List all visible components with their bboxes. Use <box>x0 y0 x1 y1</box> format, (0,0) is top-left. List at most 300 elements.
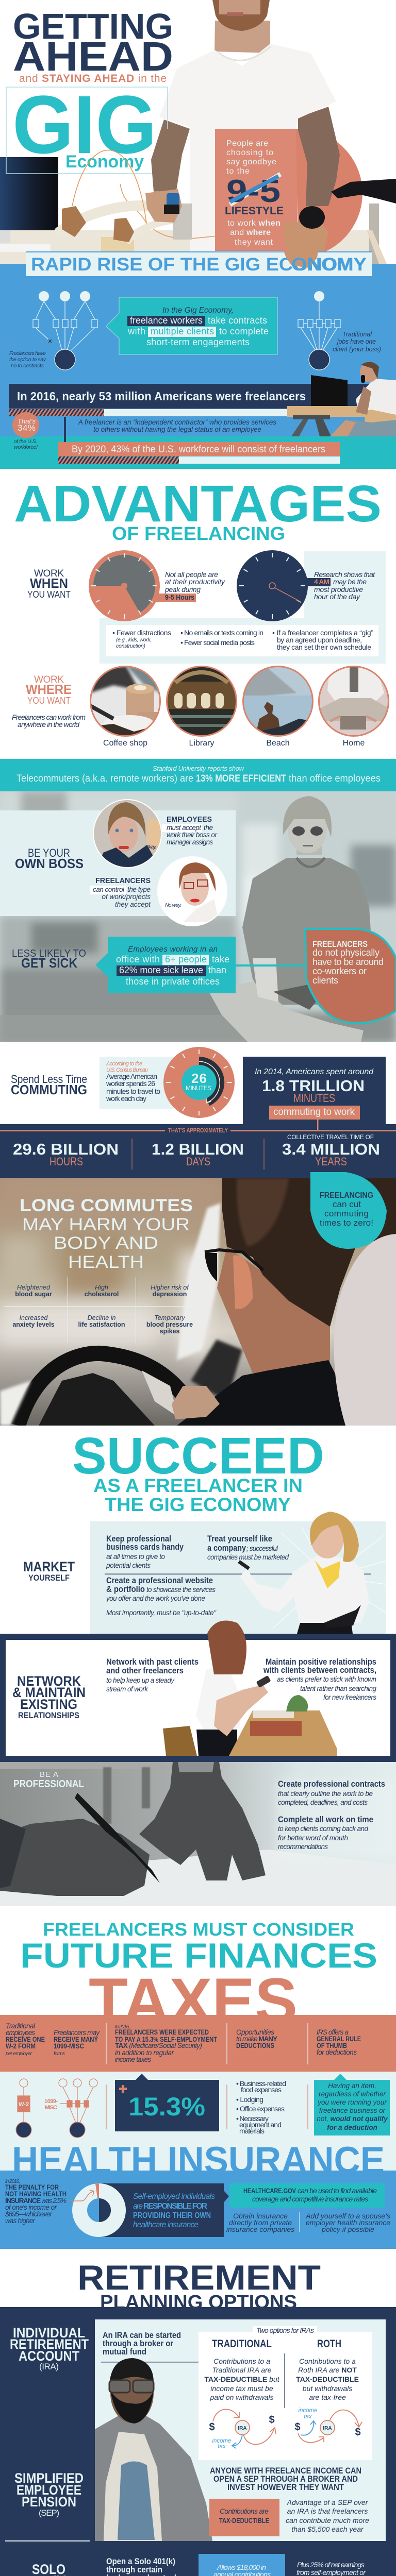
panel: ira comparison: income tax must be <box>210 2384 273 2393</box>
text: census: Average American <box>106 1072 157 1080</box>
clock: 9 to 5 <box>89 550 160 621</box>
label: ira <box>10 2325 89 2371</box>
text: marketing tips: & portfolio <box>106 1585 145 1594</box>
grid: health effects: depression <box>153 1291 187 1298</box>
panel: tax facts: income taxes <box>115 2056 151 2063</box>
photo: man with glasses <box>95 2358 212 2541</box>
list panel: • Fewer social media posts <box>180 638 255 647</box>
grid: health effects: cholesterol <box>85 1291 119 1298</box>
callout: co-workers: do not physically <box>312 947 380 958</box>
row: solo 401k <box>29 2554 367 2576</box>
title: getting ahead: GETTING <box>13 6 173 46</box>
callout: gig economy definition: multiple clients <box>151 326 214 336</box>
text: traditional jobs: jobs have one <box>336 338 376 345</box>
callout: co-workers <box>305 929 396 1023</box>
panel: ira comparison: Two options for IRAs <box>256 2326 314 2334</box>
callout: healthcare.gov: HEALTHCARE.GOV <box>243 2187 296 2195</box>
clock: 26 minutes <box>163 1047 235 1118</box>
label: sep: PENSION <box>22 2494 76 2510</box>
list: deductions <box>236 2079 286 2135</box>
callout: 9-5 lifestyle: LIFESTYLE <box>225 205 284 217</box>
label: WORK <box>34 674 64 685</box>
heading: succeed <box>72 1427 324 1515</box>
panel: ira comparison: Traditional IRA are <box>212 2366 272 2374</box>
heading: future finances: FREELANCERS MUST CONSIDER <box>43 1920 354 1940</box>
panel: tax facts: forms <box>54 2051 65 2057</box>
row: solo 401k: Allows $18,000 in <box>217 2563 266 2571</box>
callout: sick leave: those in private offices <box>126 976 220 987</box>
diagram: roth ira flow: IRA <box>323 2426 332 2431</box>
text: penalty: NOT HAVING HEALTH <box>5 2190 67 2198</box>
stat bar: 43 percent by 2020 <box>58 442 340 464</box>
heading: be a professional: BE A <box>40 1770 58 1779</box>
text: employees: the <box>204 824 213 832</box>
text: sep <box>209 2466 369 2536</box>
list panel: they can set their own schedule <box>277 643 371 651</box>
diagram: 1099-misc forms: MISC <box>45 2105 57 2111</box>
text: sep: INVEST HOWEVER THEY WANT <box>227 2482 344 2492</box>
callout: co-workers: FREELANCERS <box>312 939 368 949</box>
text: anywhere: anywhere in the world <box>18 720 80 728</box>
badge: 34 percent: That's <box>18 417 36 425</box>
list: deductions: equipment and <box>239 2121 282 2129</box>
callout: gig economy definition: In the Gig Economy, <box>162 306 234 315</box>
panel: rapid rise of the gig economy <box>0 251 396 469</box>
diagram: roth ira flow: income <box>298 2408 318 2414</box>
title: getting ahead: and STAYING AHEAD in the <box>19 73 167 84</box>
text: ira start: An IRA can be started <box>103 2331 181 2340</box>
panel: commuting totals <box>0 1057 396 1178</box>
list: deductions: food expenses <box>241 2086 282 2094</box>
callout: co-workers: co-workers or <box>312 966 367 976</box>
panel: ira comparison: TAX-DEDUCTIBLE but <box>204 2375 280 2383</box>
heading: be a professional: PROFESSIONAL <box>13 1778 84 1790</box>
photo: library <box>167 666 237 737</box>
callout: 9-5 lifestyle: to the <box>226 167 250 176</box>
text: network tips: as clients prefer to stick with known <box>277 1675 376 1683</box>
panel: tax facts: employees <box>6 2029 35 2037</box>
text: census: U.S. Census Bureau <box>106 1067 148 1073</box>
panel: commuting totals: commuting to work <box>273 1107 355 1117</box>
text: ira start: mutual fund <box>103 2347 146 2357</box>
label: WHERE <box>26 682 72 697</box>
text: professional tips: to keep clients coming back and <box>278 1825 368 1833</box>
text: network tips <box>106 1657 376 1701</box>
photo: man with bicycle <box>0 0 396 264</box>
heading: advantages of freelancing: ADVANTAGES <box>14 475 382 533</box>
badge: 34 percent: 34% <box>18 423 36 433</box>
panel: tax facts: IRS offers a <box>317 2028 349 2036</box>
grid: health effects: blood sugar <box>15 1291 52 1298</box>
label: YOU WANT <box>27 696 71 706</box>
label: WORK <box>34 568 64 579</box>
photo: presenting woman <box>238 1512 369 1634</box>
text: 9-5 hours: peak during <box>164 585 201 594</box>
callout: sick leave: office with <box>116 954 160 964</box>
diagram: traditional ira flow: tax <box>218 2444 226 2450</box>
callout: 9-5 lifestyle: and where <box>230 228 271 237</box>
panel: ira comparison: Roth IRA are NOT <box>298 2366 357 2374</box>
callout: sick leave <box>95 937 305 993</box>
panel: tax facts: RECEIVE MANY <box>54 2036 98 2043</box>
location labels: Coffee shop <box>103 739 147 748</box>
photo: driver from behind <box>0 1178 396 1426</box>
text: penalty <box>5 2179 67 2225</box>
ring outlines <box>91 667 389 736</box>
label: ira: RETIREMENT <box>10 2336 89 2352</box>
text: professional tips: for better word of mouth <box>278 1834 348 1842</box>
text: network tips: and other freelancers <box>106 1666 184 1675</box>
text: penalty: of one's income or <box>5 2204 57 2211</box>
panel: tax facts: Freelancers may <box>54 2029 100 2037</box>
text: marketing tips: Most importantly, must be "up-to-date" <box>106 1609 217 1617</box>
light panel <box>95 2319 386 2541</box>
location labels: Home <box>343 739 365 748</box>
callout: 9-5 lifestyle: say goodbye <box>226 158 276 166</box>
heading: retirement planning options: RETIREMENT <box>77 2258 321 2297</box>
callout: co-workers: have to be around <box>312 957 384 967</box>
heading: HEALTH INSURANCE <box>12 2140 385 2181</box>
diagram: roth ira flow: $ <box>355 2427 361 2438</box>
text: options: insurance companies <box>226 2225 294 2233</box>
grid: health effects: Higher risk of <box>151 1284 189 1291</box>
list: deductions: • Office expenses <box>236 2105 285 2113</box>
label: & MAINTAIN <box>12 1685 86 1700</box>
list panel: • No emails or texts coming in <box>180 629 263 637</box>
text: 9-5 hours: at their productivity <box>165 578 225 586</box>
label: COMMUTING <box>11 1082 87 1097</box>
text: freelancer definition <box>64 417 276 442</box>
panel: tax facts: Traditional <box>6 2022 36 2030</box>
text: marketing tips: business cards handy <box>106 1543 184 1552</box>
callout: gig economy definition <box>106 297 277 354</box>
heading: long commutes: BODY AND <box>54 1233 158 1253</box>
text: network tips: with clients between contracts, <box>263 1666 376 1675</box>
callout: sick leave: Employees working in an <box>128 945 218 954</box>
text: penalty: In 2016, <box>5 2179 20 2184</box>
label: NETWORK <box>17 1673 81 1689</box>
text: 4 am: Research shows that <box>314 570 375 579</box>
heading: long commutes: HEALTH <box>68 1252 144 1272</box>
text: freelancers: they accept <box>115 901 151 908</box>
list panel: • Fewer distractions <box>112 629 171 637</box>
diagram: freelancer network <box>33 291 97 370</box>
text: penalty: INSURANCE was 2.5% <box>5 2197 67 2205</box>
callout: self-employed: Self-employed individuals <box>133 2192 215 2201</box>
heading: taxes: TAXES <box>89 1965 298 2037</box>
callout: gig economy definition: with <box>127 326 145 336</box>
callout: cut commuting to zero <box>310 1172 387 1249</box>
photo: coffee shop <box>90 666 160 737</box>
panel: tax facts: TO PAY A 15.3% SELF-EMPLOYMENT <box>115 2036 218 2043</box>
text: professional tips <box>278 1780 385 1851</box>
label: RELATIONSHIPS <box>18 1710 79 1720</box>
text: census: According to the <box>106 1061 142 1067</box>
text: 4 am: may be the <box>333 578 367 586</box>
grid: health effects: Heightened <box>17 1284 51 1291</box>
label: ira: INDIVIDUAL <box>13 2325 85 2341</box>
text: anywhere: Freelancers can work from <box>12 713 86 721</box>
heading: future finances: FUTURE FINANCES <box>20 1936 377 1975</box>
label <box>27 568 71 600</box>
heading: succeed: SUCCEED <box>72 1427 324 1485</box>
label: BE YOUR <box>28 846 70 859</box>
text: sep: ANYONE WITH FREELANCE INCOME CAN <box>210 2466 361 2476</box>
photo: employee <box>93 799 162 868</box>
panel: tax facts: Opportunities <box>236 2028 274 2036</box>
diagram: roth ira flow <box>294 2408 362 2443</box>
diagram: roth ira flow: $ <box>294 2421 301 2433</box>
label: EXISTING <box>20 1697 77 1712</box>
section: work where you want <box>12 666 389 748</box>
panel: ira comparison <box>199 2326 372 2460</box>
panel background <box>0 2171 396 2249</box>
panel: commuting totals: HOURS <box>50 1155 83 1168</box>
text: professional tips: recommendations <box>278 1843 328 1851</box>
text: sep: TAX-DEDUCTIBLE <box>219 2516 269 2524</box>
clock: 26 minutes: MINUTES <box>186 1084 211 1092</box>
text: sep: Contributions are <box>220 2507 269 2515</box>
list panel: (e.g., kids, work, <box>116 637 152 643</box>
callout: rule of thumb <box>314 2074 390 2136</box>
text: freelancers: of work/projects <box>102 893 151 901</box>
callout: healthcare.gov <box>229 2183 385 2208</box>
label: GET SICK <box>21 955 77 971</box>
diagram: 1099-misc forms <box>44 2079 97 2138</box>
text: traditional jobs <box>333 331 381 353</box>
photo: beach <box>243 666 313 737</box>
text: options: Obtain insurance <box>233 2212 288 2220</box>
callout: sick leave: than <box>208 965 226 975</box>
section: retirement options <box>0 2307 396 2576</box>
banner: stanford report: Stanford University reports show <box>153 765 245 772</box>
list: deductions: materials <box>239 2127 265 2135</box>
text: marketing tips: Treat yourself like <box>207 1534 272 1544</box>
callout: sick leave: 62% more sick leave <box>119 965 203 975</box>
panel: ira comparison: TAX-DEDUCTIBLE <box>296 2375 359 2383</box>
callout: rule of thumb: for a deduction <box>327 2124 377 2131</box>
text: freelancer definition: A freelancer is an “independent contractor” who provides services <box>78 418 276 426</box>
text: employees <box>162 815 218 846</box>
callout: 9-5 lifestyle <box>225 139 284 247</box>
text: sep: can contribute much more <box>286 2516 369 2524</box>
callout: cut commuting to zero: commuting <box>324 1209 369 1218</box>
section: health insurance <box>0 2140 396 2249</box>
row: solo 401k: Plus 25% of net earnings <box>297 2561 365 2569</box>
text: professional tips: completed, deadlines, and costs <box>278 1799 368 1806</box>
sunburst rays <box>258 1528 386 1628</box>
heading: advantages of freelancing: OF FREELANCING <box>112 523 285 544</box>
photo: young man sitting cross-legged <box>0 791 396 1043</box>
text: 4 am <box>307 570 375 601</box>
label: sep: EMPLOYEE <box>16 2482 81 2498</box>
banner: stanford report: than office employees <box>289 773 381 784</box>
text: census: work each day <box>106 1094 146 1103</box>
text: marketing tips: companies must be marketed <box>207 1553 289 1561</box>
panel: commuting totals: 1.8 TRILLION <box>262 1077 365 1095</box>
title: gig economy: Economy <box>65 152 144 172</box>
diagram: traditional ira flow <box>209 2409 276 2450</box>
text: traditional jobs: Traditional <box>342 331 372 338</box>
label <box>12 1673 86 1720</box>
panel: commuting totals: MINUTES <box>293 1092 335 1105</box>
panel: ira comparison: are tax-free <box>309 2393 346 2401</box>
text: options: policy if possible <box>321 2225 374 2233</box>
heading: long commutes: MAY HARM YOUR <box>22 1215 190 1234</box>
text: marketing tips: ; successful <box>246 1545 278 1552</box>
callout: 9-5 lifestyle: People are <box>226 139 268 148</box>
badge: 34 percent: workforce! <box>14 444 38 450</box>
panel: tax facts: In 2016, <box>115 2024 130 2030</box>
callout: self-employed <box>99 2183 229 2237</box>
text: penalty: $695—whichever <box>5 2210 53 2218</box>
grid: health effects: life satisfaction <box>78 1321 125 1328</box>
text: ira start: through a broker or <box>103 2339 174 2348</box>
panel: ira comparison: Contributions to a <box>299 2357 356 2365</box>
text: freelancers <box>90 876 151 908</box>
callout: sick leave: 6+ people <box>165 954 207 964</box>
text: freelancers can say no: the option to say <box>9 357 46 363</box>
label: sep: (SEP) <box>39 2508 59 2518</box>
heading banner: RAPID RISE OF THE GIG ECONOMY <box>31 255 367 275</box>
heading: retirement planning options <box>77 2258 321 2313</box>
stat bar: 53 million <box>9 384 373 416</box>
diagram: traditional ira flow: income <box>212 2438 232 2444</box>
callout: gig economy definition: take contracts <box>208 315 267 326</box>
grid: health effects: High <box>95 1284 108 1291</box>
section: work when you want <box>27 550 386 664</box>
text: network tips: for new freelancers <box>323 1693 376 1701</box>
heading: be a professional <box>13 1770 84 1790</box>
panel: less likely to get sick <box>12 929 396 1023</box>
label: sep: SIMPLIFIED <box>14 2470 84 2486</box>
panel: tax details <box>0 2072 396 2171</box>
diagram: roth ira flow: tax <box>304 2414 312 2420</box>
panel: commuting totals: THAT'S APPROXIMATELY <box>168 1128 228 1134</box>
label <box>23 1559 75 1583</box>
panel: ira comparison: ROTH <box>317 2338 341 2350</box>
text: options <box>226 2212 390 2233</box>
panel: tax facts: TAX (Medicare/Social Security) <box>115 2042 202 2049</box>
text: employees: work their boss or <box>167 831 218 839</box>
callout: rule of thumb: not, would not qualify <box>317 2115 388 2123</box>
stat bar: 53 million: In 2016, nearly 53 million Americans were freelancers <box>17 389 306 403</box>
list: deductions: • Lodging <box>236 2095 263 2104</box>
callout: rule of thumb: Having an item, <box>328 2082 376 2090</box>
heading banner: ONOMY <box>291 255 367 275</box>
panel: tax facts: OF THUMB <box>317 2042 347 2049</box>
text: freelancer definition: to others without having the legal status of an employee <box>93 426 261 433</box>
text: traditional jobs: client (your boss) <box>333 346 381 353</box>
frame <box>0 1634 396 1762</box>
panel: tax facts: in addition to regular <box>115 2049 174 2057</box>
text: marketing tips: you offer and the work you've done <box>106 1595 205 1602</box>
panel: commuting totals: 29.6 BILLION <box>13 1140 119 1158</box>
grid: health effects: Decline in <box>88 1314 116 1321</box>
callout: 9-5 lifestyle: to work when <box>227 219 280 228</box>
label: Spend Less Time <box>11 1073 87 1086</box>
heading: long commutes: LONG COMMUTES <box>20 1196 193 1215</box>
photo: freelancer <box>157 856 227 926</box>
text: sep: Advantage of a SEP over <box>287 2498 369 2506</box>
row: solo 401k: through certain <box>106 2565 162 2574</box>
text: professional tips: Create professional contracts <box>278 1780 385 1789</box>
callout: healthcare.gov: coverage and competitive insurance rates <box>252 2195 368 2203</box>
text: marketing tips: Keep professional <box>106 1534 171 1544</box>
text: marketing tips: Create a professional website <box>106 1576 213 1585</box>
section: network and maintain relationships <box>0 1621 396 1762</box>
text: ira start <box>101 2331 199 2363</box>
text: penalty: was higher <box>5 2217 35 2225</box>
grid: health effects: blood pressure <box>146 1321 193 1328</box>
banner: stanford report: 13% MORE EFFICIENT <box>196 773 286 784</box>
text: 4 am: most productive <box>314 585 363 594</box>
photo: employee: Okay. <box>145 844 157 850</box>
callout: gig economy definition: freelance workers <box>130 315 203 326</box>
callout: gig economy definition: short-term engagements <box>146 337 250 347</box>
panel: tax facts <box>0 2015 396 2072</box>
panel: ira comparison: Contributions to a <box>213 2357 270 2365</box>
panel: commuting totals: 1.2 BILLION <box>152 1140 244 1158</box>
text: freelancers can say no <box>9 350 46 369</box>
heading: future finances <box>20 1920 377 1975</box>
clock: 26 minutes: 26 <box>191 1071 207 1086</box>
text: sep: OPEN A SEP THROUGH A BROKER AND <box>213 2474 358 2484</box>
heading: long commutes <box>20 1196 193 1272</box>
text: employees: must accept <box>167 824 202 832</box>
label: LESS LIKELY TO <box>12 948 86 959</box>
panel: commuting totals: COLLECTIVE TRAVEL TIME OF <box>287 1133 374 1141</box>
panel: ira comparison: paid on withdrawals <box>210 2393 273 2401</box>
panel: tax facts: 1099-MISC <box>54 2042 84 2050</box>
text: freelancers: the type <box>127 886 151 893</box>
light panel <box>100 551 386 664</box>
text: anywhere <box>12 713 86 728</box>
text: network tips: Maintain positive relationships <box>266 1657 376 1667</box>
text: options: Add yourself to a spouse's <box>305 2212 390 2220</box>
label <box>11 1073 87 1097</box>
heading: retirement planning options: PLANNING OPTIONS <box>100 2292 297 2313</box>
stat bar: 43 percent by 2020: By 2020, 43% of the U.S. workforce will consist of freelancers <box>72 444 325 455</box>
panel: hero <box>0 0 396 264</box>
panel: tax facts: for deductions <box>317 2048 357 2056</box>
label <box>26 674 72 706</box>
text: freelancers: can control <box>93 886 125 893</box>
title: gig economy <box>6 78 168 223</box>
text: 9-5 hours: Not all people are <box>165 570 218 579</box>
callout: cut commuting to zero: can cut <box>333 1199 361 1209</box>
callout: sick leave: take <box>212 954 229 964</box>
chart: donut 2.5 percent <box>70 2183 119 2230</box>
text: 9-5 hours <box>154 570 225 602</box>
label: ira: ACCOUNT <box>19 2348 79 2364</box>
label: MARKET <box>23 1559 75 1574</box>
text: sep: than $5,500 each year <box>291 2525 364 2533</box>
panel: commuting totals: YEARS <box>315 1155 347 1168</box>
location labels: Beach <box>266 739 290 748</box>
stat: plus 15.3 percent: 15.3% <box>128 2092 205 2121</box>
heading: succeed: THE GIG ECONOMY <box>105 1494 291 1515</box>
diagram: traditional job network <box>298 291 340 370</box>
panel: be your own boss <box>0 799 236 926</box>
label: sep <box>5 2470 90 2541</box>
photo: home <box>319 666 389 737</box>
text: professional tips: Complete all work on time <box>278 1815 373 1824</box>
stat: plus 15.3 percent <box>115 2074 219 2131</box>
callout: 9-5 lifestyle: they want <box>235 238 273 247</box>
panel: commuting totals: DAYS <box>186 1155 210 1168</box>
callout: cut commuting to zero: times to zero! <box>320 1218 373 1228</box>
